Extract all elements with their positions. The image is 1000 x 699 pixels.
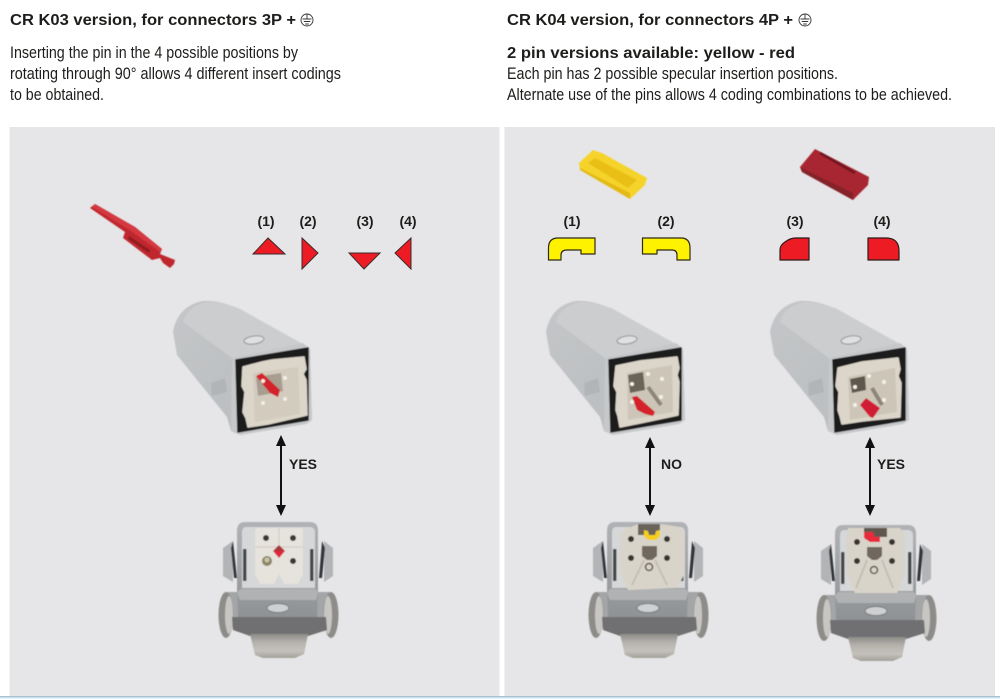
position labels 4P: (3) [786, 213, 804, 229]
male connector 4P with red pin YES [770, 301, 909, 435]
icon: red coding pin 3P [90, 204, 175, 268]
position labels 3P [257, 213, 417, 229]
male connector 4P with red pin NO [546, 301, 685, 435]
arrow YES right [865, 437, 875, 516]
arrow 3P [276, 435, 286, 516]
red position symbols [780, 238, 899, 260]
position labels 4P: (2) [657, 213, 675, 229]
heading: CR K03 version: CR K03 version, for connectors 3P + [10, 12, 296, 29]
arrow NO [645, 437, 655, 516]
icon: earth symbol right [799, 14, 811, 26]
text: CR K04 description [507, 45, 952, 104]
position labels 4P: (4) [873, 213, 891, 229]
icon: red coding block [800, 149, 869, 200]
text: CR K03 description: rotating through 90° allows 4 different insert codings [10, 65, 341, 83]
triangle symbols 3P [253, 238, 411, 269]
icon: earth symbol [301, 14, 313, 26]
position labels 3P: (2) [299, 213, 317, 229]
icon: yellow coding pin [579, 150, 647, 199]
panel: CR K04 background [504, 127, 995, 696]
position labels 3P: (1) [257, 213, 275, 229]
text: CR K03 description [10, 44, 341, 104]
bottom rule [0, 696, 1000, 699]
female housing 4P with yellow pin [588, 522, 708, 658]
position labels 4P [563, 213, 891, 229]
text: CR K03 description: to be obtained. [10, 86, 104, 104]
text: CR K04 description: Each pin has 2 possible specular insertion positions. [507, 65, 838, 83]
panel: CR K03 background [10, 127, 500, 696]
male connector 3P [173, 301, 312, 435]
yellow position symbols [548, 238, 690, 260]
text: CR K03 description: Inserting the pin in the 4 possible positions by [10, 44, 299, 62]
label YES left: YES [289, 456, 317, 472]
position labels 3P: (3) [356, 213, 374, 229]
label YES right: YES [877, 456, 905, 472]
heading: CR K04 version: CR K04 version, for connectors 4P + [507, 12, 793, 29]
female housing 3P [218, 522, 338, 658]
position labels 3P: (4) [399, 213, 417, 229]
position labels 4P: (1) [563, 213, 581, 229]
text: CR K04 description: 2 pin versions available: yellow - red [507, 45, 795, 62]
female housing 4P with red pin [816, 525, 936, 661]
label NO: NO [661, 456, 682, 472]
